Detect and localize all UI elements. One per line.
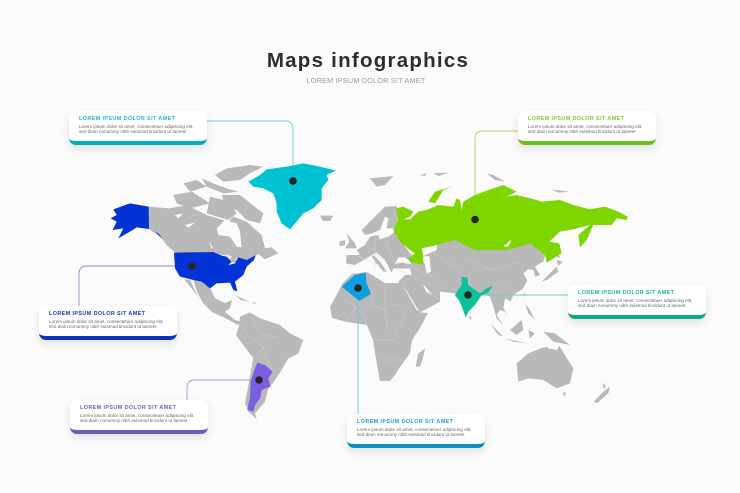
card: Greenland: sed diam nonummy nibh euismod tincidunt ut laoreet [79, 129, 187, 134]
country: Alaska and USA [111, 203, 256, 291]
country borders [240, 235, 520, 372]
connector: India [468, 294, 568, 296]
card: India: sed diam nonummy nibh euismod tincidunt ut laoreet [578, 303, 686, 308]
card: USA: sed diam nonummy nibh euismod tincidunt ut laoreet [49, 324, 157, 329]
card: Greenland: LOREM IPSUM DOLOR SIT AMET [79, 116, 175, 122]
card: Argentina: sed diam nonummy nibh euismod tincidunt ut laoreet [80, 418, 188, 423]
card: Russia: LOREM IPSUM DOLOR SIT AMET [528, 116, 624, 122]
card: Algeria [347, 414, 485, 448]
South America and Africa [236, 312, 303, 419]
Eurasia [339, 206, 460, 315]
card: Argentina [70, 400, 208, 434]
card: Russia: Lorem ipsum dolor sit amet, consectetuer adipiscing elit, [528, 124, 642, 129]
Mexico and Central America [184, 278, 243, 325]
card: USA: LOREM IPSUM DOLOR SIT AMET [49, 310, 145, 316]
country: Greenland [248, 163, 336, 229]
card: USA [39, 306, 177, 340]
subtitle: LOREM IPSUM DOLOR SIT AMET [306, 76, 426, 85]
card: Greenland: Lorem ipsum dolor sit amet, consectetuer adipiscing elit, [79, 124, 193, 129]
card: Algeria: sed diam nonummy nibh euismod tincidunt ut laoreet [357, 432, 465, 437]
country: Russia [393, 185, 628, 265]
card: Greenland [69, 111, 207, 145]
card: India [568, 285, 706, 319]
card: Algeria: Lorem ipsum dolor sit amet, consectetuer adipiscing elit, [357, 427, 471, 432]
card: Argentina: LOREM IPSUM DOLOR SIT AMET [80, 404, 176, 410]
country: Argentina [247, 363, 273, 412]
connector: Greenland [207, 121, 293, 181]
country: Algeria [342, 273, 371, 301]
connector: Argentina [187, 380, 259, 400]
country: India [455, 277, 493, 317]
title: Maps infographics [267, 49, 469, 72]
connector: Russia [475, 131, 518, 219]
card: India: Lorem ipsum dolor sit amet, consectetuer adipiscing elit, [578, 298, 692, 303]
card: Russia: sed diam nonummy nibh euismod tincidunt ut laoreet [528, 129, 636, 134]
card: USA: Lorem ipsum dolor sit amet, consectetuer adipiscing elit, [49, 319, 163, 324]
card: India: LOREM IPSUM DOLOR SIT AMET [578, 290, 674, 296]
connector: USA [79, 266, 192, 306]
card: Algeria: LOREM IPSUM DOLOR SIT AMET [357, 418, 453, 424]
card: Argentina: Lorem ipsum dolor sit amet, consectetuer adipiscing elit, [80, 413, 194, 418]
marker dots [188, 177, 479, 384]
card: Russia [518, 111, 656, 145]
grey land masses [148, 165, 610, 419]
connector: Algeria [357, 287, 359, 414]
